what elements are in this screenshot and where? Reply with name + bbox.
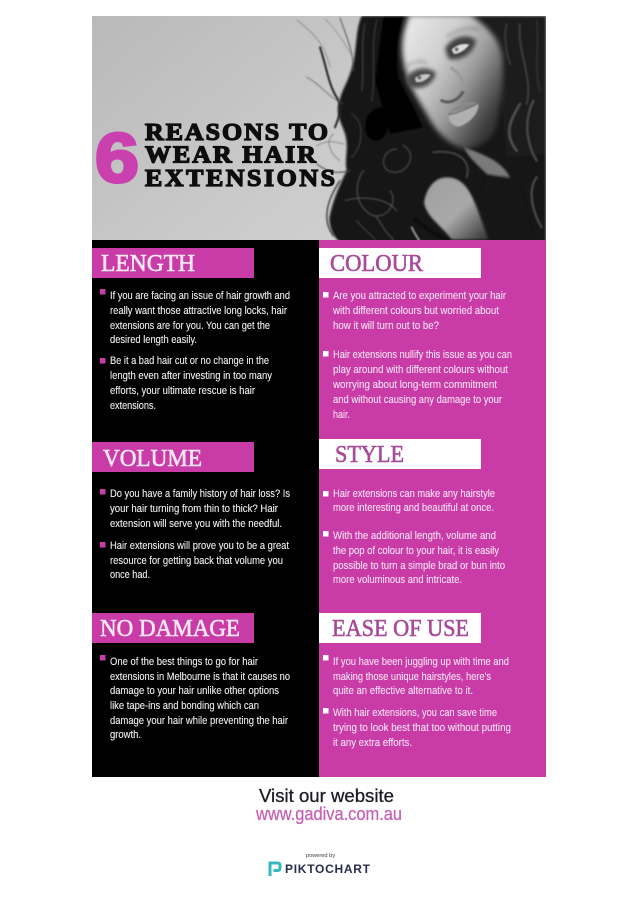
bullets: volume: Do you have a family history of hair loss? Is: [110, 488, 290, 500]
bullets: colour: Are you attracted to experiment your hair: [333, 290, 506, 302]
photo header panel: [92, 15, 546, 242]
bullets: no damage: growth.: [110, 729, 141, 741]
bullets: style: more interesting and beautiful at once.: [333, 502, 494, 514]
title lines: [145, 120, 335, 192]
bullets: colour: hair.: [333, 409, 350, 421]
bullets: style: With the additional length, volume and: [333, 530, 496, 542]
heading: length: [92, 248, 254, 278]
bullets: length: length even after investing in too many: [110, 370, 272, 382]
section: colour: [319, 248, 512, 421]
bullets: length: extensions.: [110, 400, 156, 412]
section: ease of use: [319, 613, 511, 749]
bullets: colour: with different colours but worried about: [332, 305, 500, 317]
bullets: colour: play around with different colours without: [333, 364, 509, 376]
heading: colour: [319, 248, 481, 278]
powered by piktochart logo: PIKTOCHART: [285, 862, 371, 876]
bullets: style: the pop of colour to your hair, it is easily: [333, 545, 499, 557]
bullets: no damage: damage to your hair unlike other options: [110, 685, 279, 697]
heading: style: [319, 439, 481, 469]
bullets: no damage: [100, 655, 290, 741]
bullets: ease of use: quite an effective alternative to it.: [333, 685, 473, 697]
bullets: length: desired length easily.: [110, 334, 197, 346]
bullets: volume: once had.: [110, 569, 150, 581]
bullets: style: more voluminous and intricate.: [333, 574, 462, 586]
title lines: EXTENSIONS: [145, 166, 335, 192]
heading: volume: [92, 442, 254, 472]
heading: colour: COLOUR: [330, 251, 423, 277]
title: [95, 119, 335, 197]
title lines: REASONS TO: [145, 120, 328, 146]
bullets: colour: [323, 290, 512, 421]
icon: piktochart mark: [270, 863, 280, 876]
bullets: ease of use: making those unique hairstyles, here's: [333, 671, 491, 683]
bullets: ease of use: If you have been juggling up with time and: [333, 656, 509, 668]
bullets: volume: Hair extensions will prove you to be a great: [110, 540, 290, 552]
bullets: no damage: like tape-ins and bonding which can: [110, 700, 259, 712]
footer call to action: www.gadiva.com.au: [255, 803, 402, 824]
heading: volume: VOLUME: [103, 446, 202, 472]
heading: ease of use: EASE OF USE: [332, 616, 469, 642]
eyes, nose and lips: [415, 44, 478, 127]
panel: black column: [92, 240, 319, 777]
bullets: volume: extension will serve you with the needful.: [110, 518, 282, 530]
bullets: length: really want those attractive long locks, hair: [110, 305, 287, 317]
bullets: ease of use: [323, 655, 511, 749]
bullets: volume: your hair turning from thin to thick? Hair: [110, 503, 278, 515]
bullets: colour: and without causing any damage to your: [333, 394, 502, 406]
heading: length: LENGTH: [101, 251, 195, 277]
bullets: style: Hair extensions can make any hairstyle: [333, 488, 495, 500]
heading: no damage: NO DAMAGE: [100, 616, 240, 642]
hair mass: [329, 16, 546, 242]
powered by piktochart logo: powered by: [306, 853, 335, 859]
photo: woman with flowing dark hair: [297, 15, 546, 242]
powered by piktochart logo: [270, 853, 371, 876]
hair strands: [297, 18, 542, 241]
neck and shoulder skin: [422, 146, 511, 240]
section: volume: [92, 442, 290, 581]
bullets: colour: Hair extensions nullify this issue as you can: [333, 349, 512, 361]
bullets: style: possible to turn a simple brad or bun into: [333, 560, 505, 572]
section: no damage: [92, 613, 290, 741]
bullets: volume: [100, 488, 290, 581]
bullets: ease of use: trying to look best that too without putting: [333, 722, 511, 734]
footer call to action: Visit our website: [259, 785, 394, 806]
bullets: no damage: One of the best things to go for hair: [110, 656, 258, 668]
section: style: [319, 439, 505, 586]
panel: pink column: [319, 240, 546, 777]
section: length: [92, 248, 290, 412]
bullets: no damage: damage your hair while preventing the hair: [110, 715, 288, 727]
bullets: colour: worrying about long-term commitment: [332, 379, 498, 391]
bullets: no damage: extensions in Melbourne is that it causes no: [110, 671, 290, 683]
heading: style: STYLE: [335, 442, 404, 468]
bullets: length: [100, 289, 290, 412]
bullets: length: If you are facing an issue of hair growth and: [110, 290, 290, 302]
bullets: length: extensions are for you. You can get the: [110, 320, 270, 332]
big numeral 6: 6: [95, 119, 139, 197]
bullets: ease of use: With hair extensions, you can save time: [333, 707, 497, 719]
face: [402, 15, 503, 148]
bullets: ease of use: it any extra efforts.: [333, 737, 412, 749]
bullets: style: [323, 488, 505, 586]
bullets: length: efforts, your ultimate rescue is hair: [110, 385, 255, 397]
title lines: WEAR HAIR: [145, 142, 317, 168]
bullets: length: Be it a bad hair cut or no change in the: [110, 355, 269, 367]
eye shadows and brows: [404, 28, 480, 88]
bullets: volume: resource for getting back that volume you: [110, 555, 283, 567]
bullets: colour: how it will turn out to be?: [333, 320, 439, 332]
footer call to action: [255, 785, 402, 824]
